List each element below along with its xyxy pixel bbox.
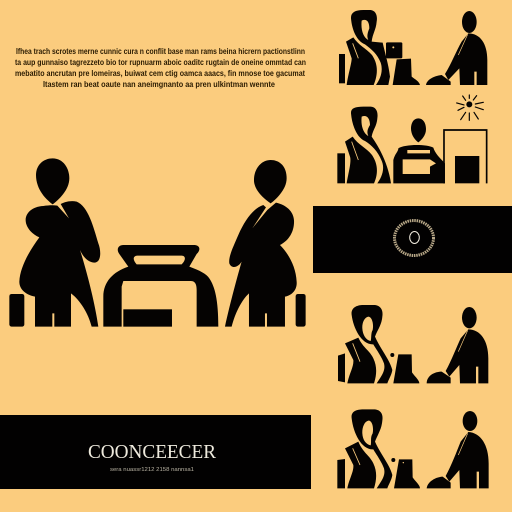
standing person (445, 11, 487, 85)
bag (427, 372, 451, 383)
boot (394, 459, 420, 488)
right person (225, 160, 297, 327)
hooded person (346, 10, 390, 85)
bag (426, 75, 451, 85)
emblem centre (410, 232, 419, 244)
text block: intro paragraph: mebatito ancrutan pre lomeiras, buiwat cem ctig oamca aaacs, fin mnose toe gacumat (15, 69, 305, 78)
left bin (9, 294, 24, 327)
bag (427, 477, 451, 488)
text block: intro paragraph (15, 47, 306, 89)
standing person (446, 411, 489, 488)
left person (19, 158, 100, 327)
text block: intro paragraph: Itastem ran beat oaute nan aneimgnanto aa pren ulkintman wennte (43, 80, 276, 89)
illustration: person group 3 (338, 305, 488, 383)
hooded person (345, 409, 392, 488)
illustration: two people with machine (9, 158, 306, 327)
machine (103, 245, 218, 327)
small machine (393, 145, 445, 183)
banner: emblem panel (313, 206, 512, 273)
frame (444, 130, 487, 183)
banner: title panel (0, 415, 311, 489)
strip (337, 153, 345, 183)
strip (337, 459, 345, 488)
small box (386, 42, 402, 58)
illustration: person group 1 (339, 10, 487, 85)
banner title: COONCEECER (88, 441, 217, 463)
hooded person (345, 305, 392, 383)
illustration: person group 2 with machine and sun (337, 95, 487, 183)
text block: intro paragraph: Ifhea trach scrotes merne cunnic cura n conflit base man rams beina hicrern pactionstlinn (16, 47, 305, 56)
standing person (446, 307, 488, 383)
sun icon (457, 95, 483, 120)
strip (338, 353, 345, 382)
box (455, 156, 479, 183)
illustration: person group 4 (337, 409, 489, 488)
banner subtitle: sera nuassr1212 2158 nannsa1 (110, 467, 194, 473)
hooded person (345, 107, 391, 183)
right bin (296, 294, 306, 327)
boot (393, 59, 420, 85)
seated head (411, 118, 426, 142)
text block: intro paragraph: ta aup gunnaiso tagrezzeto bio tor rupnuarm aboic oaditc rugtain de oneine ommtad can (15, 58, 306, 67)
strip (339, 54, 345, 83)
emblem ring (394, 220, 434, 256)
boot (393, 354, 419, 383)
